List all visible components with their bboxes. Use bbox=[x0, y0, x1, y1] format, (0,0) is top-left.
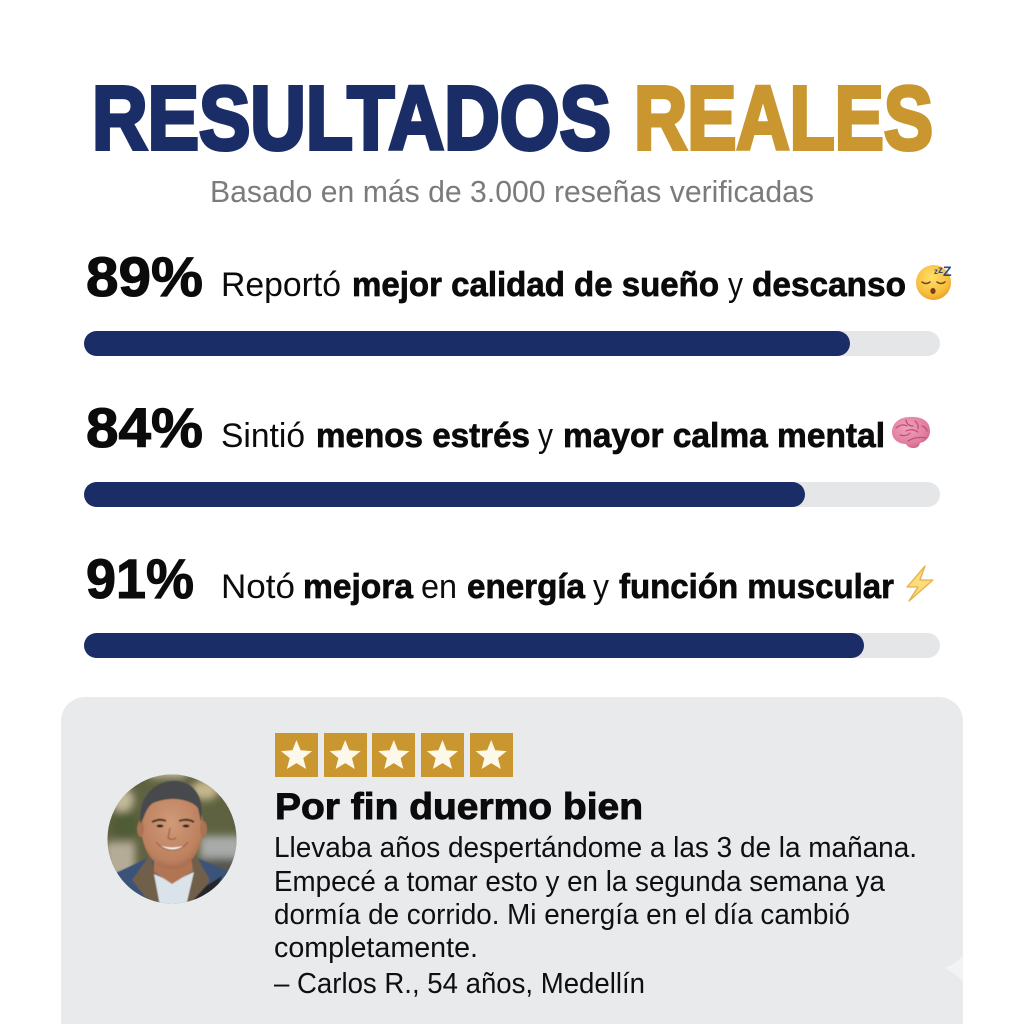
percentage: 89%: 89% bbox=[86, 245, 203, 308]
icon: lightning bolt bbox=[907, 566, 933, 601]
title word: REALES: REALES bbox=[634, 69, 933, 169]
stat label: energy: función muscular bbox=[619, 568, 894, 606]
stat label: stress: mayor calma mental bbox=[563, 417, 885, 455]
stat label: sleep: Reportó bbox=[221, 266, 341, 304]
title word: RESULTADOS: RESULTADOS bbox=[92, 69, 611, 169]
icon: sleeping face: z bbox=[938, 265, 943, 276]
jacket bbox=[116, 858, 228, 898]
hair bbox=[140, 781, 202, 824]
stat label: stress: y bbox=[538, 417, 554, 455]
stat label: sleep bbox=[221, 266, 906, 304]
panel: testimonial bbox=[61, 697, 963, 1024]
icon: sleeping face: z bbox=[934, 267, 938, 276]
eyes, brows, nose, smile bbox=[152, 820, 194, 822]
portrait photo bbox=[108, 774, 236, 904]
progress bar: 89% bbox=[84, 331, 940, 356]
stat label: energy: y bbox=[593, 568, 610, 606]
progress bar: 91% bbox=[84, 633, 940, 658]
testimonial body: Llevaba años despertándome a las 3 de la mañana. bbox=[274, 832, 917, 864]
stat row: 91% bbox=[84, 547, 940, 658]
stat label: energy: Notó bbox=[221, 568, 295, 606]
testimonial body bbox=[274, 832, 917, 964]
stat label: energy: energía bbox=[467, 568, 586, 606]
stat label: sleep: descanso bbox=[752, 266, 906, 304]
stat label: stress: Sintió bbox=[221, 417, 305, 455]
icon: sleeping face: Z bbox=[943, 263, 952, 279]
stat label: energy bbox=[221, 568, 894, 606]
testimonial heading: Por fin duermo bien bbox=[275, 786, 643, 827]
testimonial body: dormía de corrido. Mi energía en el día cambió bbox=[274, 899, 850, 931]
percentage: 84%: 84% bbox=[86, 396, 203, 459]
stat row: 89% bbox=[84, 245, 952, 356]
stat label: energy: en bbox=[421, 568, 457, 606]
testimonial body: Empecé a tomar esto y en la segunda semana ya bbox=[274, 866, 886, 898]
icon: sleeping face bbox=[916, 263, 952, 300]
testimonial attribution: – Carlos R., 54 años, Medellín bbox=[274, 968, 645, 1000]
stat row: 84% bbox=[84, 396, 940, 507]
stat label: stress bbox=[221, 417, 885, 455]
star rating bbox=[275, 733, 513, 777]
stat label: energy: mejora bbox=[303, 568, 414, 606]
progress bar: 84% bbox=[84, 482, 940, 507]
testimonial body: completamente. bbox=[274, 932, 478, 964]
icon: brain bbox=[892, 417, 930, 448]
title bbox=[92, 69, 933, 169]
stat label: sleep: mejor calidad de sueño bbox=[352, 266, 719, 304]
neck and face bbox=[153, 860, 194, 884]
subtitle: Basado en más de 3.000 reseñas verificadas bbox=[210, 174, 814, 209]
percentage: 91%: 91% bbox=[86, 547, 194, 610]
stat label: stress: menos estrés bbox=[316, 417, 530, 455]
stat label: sleep: y bbox=[728, 266, 744, 304]
